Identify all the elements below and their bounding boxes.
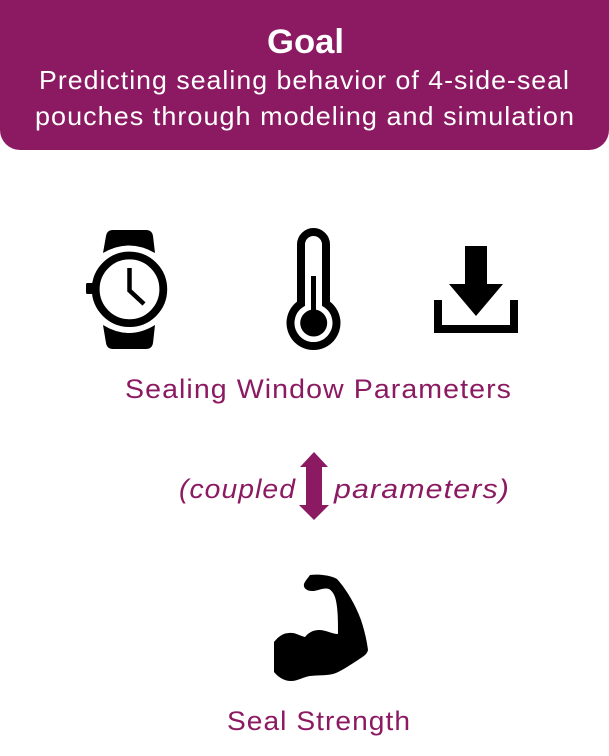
label: seal strength: Seal Strength — [227, 706, 411, 736]
panel: goal banner — [0, 0, 609, 150]
icon: download arrow into tray — [434, 246, 518, 333]
label: sealing window parameters: Sealing Window Parameters — [125, 374, 512, 404]
heading: goal: Goal — [267, 23, 344, 61]
icon: flexed bicep — [274, 575, 368, 681]
arrow: double-headed — [299, 452, 329, 520]
text: goal description line 2: pouches through modeling and simulation — [35, 101, 575, 131]
text: goal description line 1: Predicting sealing behavior of 4-side-seal — [39, 65, 570, 95]
text: parameters: parameters) — [333, 474, 510, 504]
icon: wristwatch — [86, 230, 163, 349]
icon: thermometer — [290, 232, 336, 346]
text: coupled: (coupled — [179, 474, 296, 504]
